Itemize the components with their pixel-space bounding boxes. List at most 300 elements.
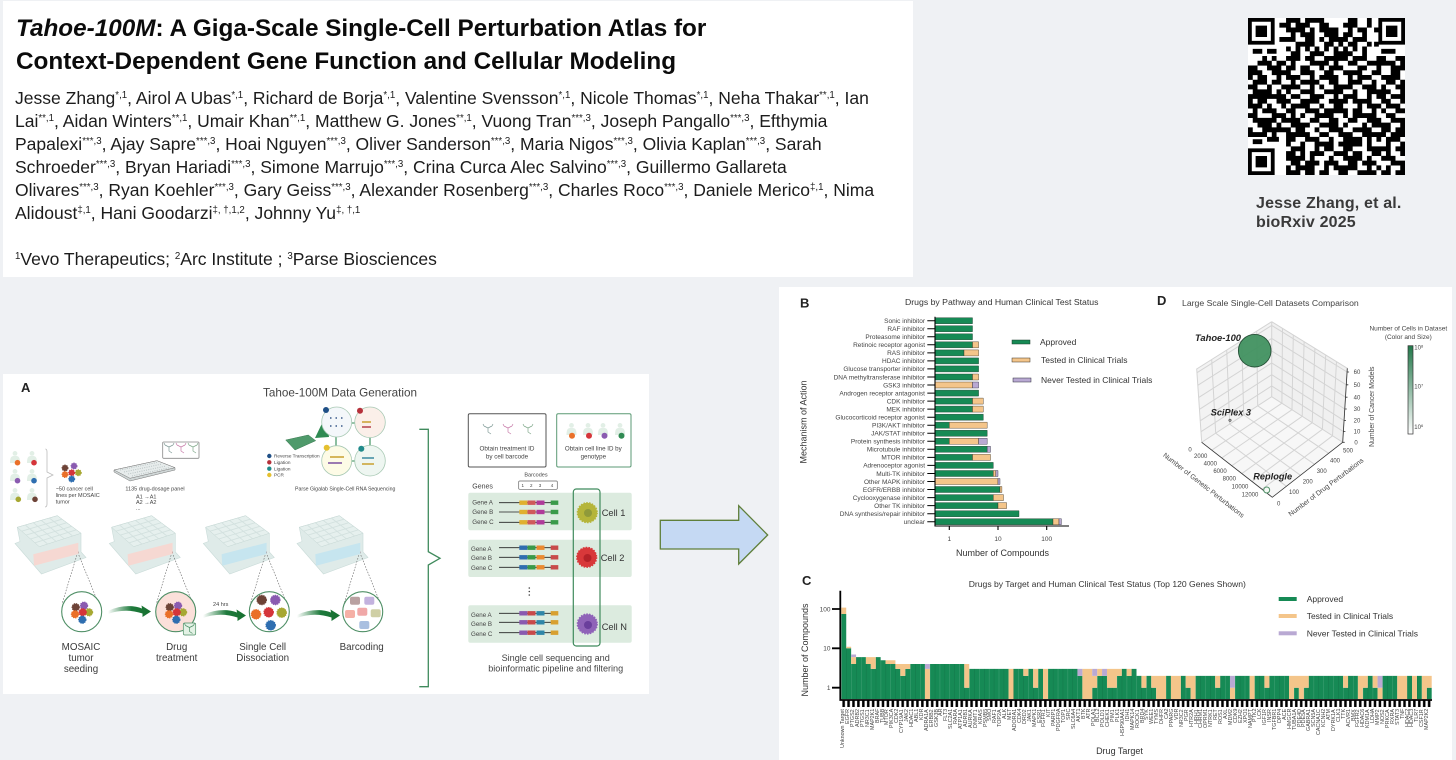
drug target gene labels: PRKCA — [1385, 708, 1391, 727]
cell row 2 — [468, 540, 632, 577]
cell row 1 — [468, 493, 632, 530]
drug target gene labels: SYK — [1144, 708, 1150, 719]
panel letter B: B — [800, 296, 809, 311]
drug target gene labels: LCK — [1257, 708, 1263, 719]
chart B y axis title: Mechanism of Action — [798, 380, 808, 464]
drug target gene labels: MAPK14 — [1130, 708, 1136, 730]
drug target gene labels: ACVR1 — [1346, 708, 1352, 726]
drug target gene labels: ABL1 — [914, 708, 920, 722]
color scale legend: 7 — [1421, 382, 1424, 388]
author list: Jesse Zhang*,1, Airol A Ubas*,1, Richard de Borja*,1, Valentine Svensson*,1, Nicole Thomas*,1, Neha Thakar**,1, Ian — [15, 88, 869, 108]
drug target gene labels: NR3C2 — [1179, 708, 1185, 726]
drug panel note: 1135 drug-dosage panel — [125, 487, 185, 493]
color scale legend — [1369, 326, 1447, 434]
panel A: Tahoe-100M data generation — [3, 374, 649, 694]
drug target gene labels: TOP2A — [997, 708, 1003, 726]
cell row 2: Gene A — [471, 546, 493, 553]
cell row N: Gene B — [471, 621, 492, 628]
cell row N: Cell N — [602, 622, 627, 632]
chart D title: Large Scale Single-Cell Datasets Comparison — [1182, 298, 1359, 308]
drug target gene labels: DHFR — [1159, 708, 1165, 723]
drug target gene labels: BCL2 — [1095, 708, 1101, 722]
bar chart: drug targets: 1 — [827, 685, 831, 692]
drug target gene labels: BRD4 — [1140, 708, 1146, 723]
sequencing legend: Ligation — [274, 460, 291, 465]
drug target gene labels: CLK1 — [1336, 708, 1342, 722]
drug target gene labels: HDAC3 — [1409, 708, 1415, 727]
drug target gene labels: ERBB2 — [929, 708, 935, 726]
drug target gene labels: RXRA — [1390, 708, 1396, 723]
drug target gene labels: CACNA1C — [1316, 708, 1322, 734]
drug target gene labels: SLC2A1 — [948, 708, 954, 729]
drug target gene labels: EGFR — [845, 708, 851, 723]
bar chart: mechanism of action: DNA methyltransferase inhibitor — [834, 374, 926, 381]
drug target gene labels: XPO1 — [1243, 708, 1249, 723]
bar chart: mechanism of action — [834, 317, 1069, 543]
step: single cell dissociation: Single Cell — [239, 642, 286, 653]
drug target gene labels: ADRB1 — [963, 708, 969, 726]
drug target gene labels: KDM1A — [1365, 708, 1371, 727]
drug target gene labels: OPRM1 — [1203, 708, 1209, 728]
drug target gene labels: ADRA1A — [924, 708, 930, 730]
drug target gene labels: CHEK1 — [1105, 708, 1111, 726]
drug target gene labels: AR — [938, 708, 944, 716]
drug target gene labels: HDAC1 — [909, 708, 915, 727]
drug target gene labels: DPP4 — [1277, 708, 1283, 723]
drug target gene labels: DYRK1A — [1331, 708, 1337, 730]
bubble: Tahoe-100 — [1195, 332, 1271, 367]
arrow: treatment to dissociation, 24 hrs: 24 hrs — [213, 602, 229, 608]
drug target gene labels: RAF1 — [992, 708, 998, 722]
chart B legend — [1012, 337, 1152, 385]
drug target gene labels: PSMB5 — [983, 708, 989, 727]
drug target gene labels: HRH1 — [1194, 708, 1200, 723]
drug target gene labels: ADORA1 — [1012, 708, 1018, 731]
drug target gene labels: ESR1 — [1037, 708, 1043, 723]
drug target gene labels: TOP1 — [1061, 708, 1067, 722]
drug target gene labels: NR3C1 — [865, 708, 871, 726]
drug target gene labels: IDH1 — [1125, 708, 1131, 721]
axis tick labels: 10 — [1354, 430, 1361, 436]
cell line note: tumor — [56, 500, 70, 506]
drug target gene labels: GSK3B — [934, 708, 940, 726]
pipeline caption — [488, 653, 623, 674]
drug target gene labels: WEE1 — [1149, 708, 1155, 724]
chart C legend: Approved — [1307, 594, 1343, 604]
title: Tahoe-100M: A Giga-Scale Single-Cell Perturbation Atlas for — [16, 15, 706, 42]
cell row 1: Gene C — [472, 519, 494, 526]
drug target gene labels: MTOR — [884, 708, 890, 724]
axis tick labels: 500 — [1343, 448, 1354, 454]
box: treatment ID — [468, 414, 546, 467]
drug target gene labels: KRAS — [978, 708, 984, 723]
bar chart: mechanism of action: Multi-TK inhibitor — [876, 471, 926, 478]
curly brace — [419, 429, 440, 687]
drug target gene labels: CSF1R — [1419, 708, 1425, 726]
bar chart: mechanism of action: MEK inhibitor — [886, 406, 926, 413]
arrow: dissociation to barcoding — [297, 610, 340, 621]
cell line note: lines per MOSAIC — [56, 493, 100, 499]
bar chart: mechanism of action: GSK3 inhibitor — [883, 382, 926, 389]
drug target gene labels: PIK3CA — [889, 708, 895, 728]
step: drug treatment: treatment — [156, 653, 198, 664]
Parse sequencing workflow — [286, 407, 385, 476]
chart B x axis title: Number of Compounds — [956, 548, 1050, 558]
color scale legend: 8 — [1421, 344, 1424, 348]
drug target gene labels: EZH2 — [1238, 708, 1244, 722]
step: barcoding — [340, 592, 384, 653]
drug target gene labels: MAPK1 — [1032, 708, 1038, 727]
patient cell lines — [10, 449, 53, 507]
drug target gene labels: ADRB2 — [855, 708, 861, 726]
chart C legend: Never Tested in Clinical Trials — [1307, 628, 1418, 638]
axis titles: Number of Cancer Models — [1369, 366, 1376, 447]
panel C: drugs by target — [800, 573, 1432, 756]
arrow: treatment to dissociation, 24 hrs — [203, 602, 246, 621]
drug target gene labels: INSR — [1267, 708, 1273, 721]
bar chart: mechanism of action: HDAC inhibitor — [882, 358, 926, 365]
drug target gene labels: JAK2 — [904, 708, 910, 721]
axis tick labels: 10000 — [1232, 485, 1249, 491]
drug target gene labels: CA2 — [1164, 708, 1170, 719]
bar chart: mechanism of action: Retinoic receptor agonist — [853, 342, 925, 349]
results panel background — [779, 287, 1452, 760]
author list: Papalexi***,3, Ajay Sapre***,3, Hoai Nguyen***,3, Oliver Sanderson***,3, Maria Nigos***,3, Olivia Kaplan***,3, Sarah — [15, 134, 822, 154]
author list: Lai**,1, Aidan Winters**,1, Umair Khan**,1, Matthew G. Jones**,1, Vuong Tran***,3, Joseph Pangallo***,3, Efthymia — [15, 111, 827, 131]
author list: Alidoust‡,1, Hani Goodarzi‡, †,1,2, Johnny Yu‡, †,1 — [15, 203, 360, 223]
drug target gene labels: RARA — [953, 708, 959, 723]
cell line note: ~50 cancer cell — [56, 486, 93, 492]
cancer cell cluster — [62, 463, 81, 482]
drug target gene labels: PPARG — [1169, 708, 1175, 727]
bar chart: mechanism of action: unclear — [904, 519, 926, 526]
drug target gene labels: JAK1 — [1027, 708, 1033, 721]
drug target gene labels: ATP1A1 — [958, 708, 964, 728]
axis tick labels: 200 — [1303, 480, 1313, 486]
drug target gene labels: SCN5A — [1311, 708, 1317, 726]
citation text: Jesse Zhang, et al. — [1256, 195, 1402, 212]
drug target gene labels: SMO — [987, 708, 993, 721]
bar chart: mechanism of action: RAS inhibitor — [887, 350, 926, 357]
small drug plate — [114, 461, 175, 481]
color scale legend: 10 — [1414, 346, 1421, 352]
cell row 1: Gene B — [472, 509, 493, 516]
bar chart: mechanism of action: MTOR inhibitor — [881, 455, 926, 462]
barcodes key: 4 — [551, 483, 554, 488]
barcodes key: 1 — [521, 483, 524, 488]
panel B: drugs by pathway — [798, 296, 1152, 558]
axis tick labels: 400 — [1330, 458, 1341, 464]
color scale legend: (Color and Size) — [1385, 334, 1432, 341]
chart C x axis title: Drug Target — [1096, 746, 1143, 756]
drug target gene labels: NOS2 — [1380, 708, 1386, 723]
drug target gene labels: DNMT1 — [973, 708, 979, 727]
axis tick labels: 8000 — [1223, 477, 1237, 483]
color scale legend: 6 — [1421, 423, 1424, 428]
bar chart: mechanism of action: Cyclooxygenase inhibitor — [853, 495, 926, 502]
axis titles: Number of Drug Perturbations — [1288, 457, 1366, 518]
barcodes key: Genes — [472, 484, 493, 490]
citation text: bioRxiv 2025 — [1256, 214, 1356, 231]
bubble: Replogle — [1253, 472, 1292, 493]
drug target gene labels: VDR — [1174, 708, 1180, 720]
drug target gene labels: TNF — [1400, 708, 1406, 719]
chart B legend: Tested in Clinical Trials — [1041, 355, 1127, 365]
bar chart: mechanism of action: Microtubule inhibitor — [867, 447, 926, 454]
axis tick labels: 0 — [1354, 440, 1358, 446]
bar chart: mechanism of action: Androgen receptor antagonist — [839, 390, 925, 397]
bar chart: mechanism of action: Sonic inhibitor — [884, 318, 926, 325]
drug target gene labels: ATM — [1326, 708, 1332, 719]
citation text — [1256, 195, 1402, 231]
cell row 2: Gene B — [471, 555, 492, 562]
axis tick labels: 4000 — [1204, 462, 1218, 468]
bar chart: mechanism of action: JAK/STAT inhibitor — [871, 431, 926, 438]
drug target gene labels: ALK — [1002, 708, 1008, 719]
drug target gene labels: TUBA1A — [1292, 708, 1298, 729]
bubble: SciPlex 3: SciPlex 3 — [1211, 408, 1251, 418]
drug target gene labels: PTGS2 — [850, 708, 856, 726]
axis titles — [1161, 366, 1376, 520]
sequencing legend: Ligation — [274, 466, 291, 471]
color scale legend: Number of Cells in Dataset — [1369, 326, 1447, 333]
box: cell line ID: genotype — [581, 454, 607, 460]
cell row 1: Cell 1 — [602, 508, 625, 518]
bubble: Replogle: Replogle — [1253, 472, 1292, 482]
title — [16, 15, 706, 75]
header panel: title and authors — [3, 1, 913, 277]
axis tick labels: 300 — [1317, 469, 1327, 475]
drug target gene labels: HDAC2 — [1405, 708, 1411, 727]
arrow: seeding to treatment — [108, 606, 151, 617]
drug target gene labels: BRAF — [875, 708, 881, 723]
bar chart: mechanism of action: PI3K/AKT inhibitor — [872, 422, 926, 430]
color scale legend: 10 — [1414, 425, 1421, 431]
drug target gene labels: HTR2A — [1189, 708, 1195, 726]
axis tick labels: 12000 — [1242, 492, 1259, 498]
chart C legend — [1279, 594, 1418, 638]
axis titles: Number of Genetic Perturbations — [1161, 452, 1246, 520]
drug target gene labels: CHRM1 — [1198, 708, 1204, 728]
author list: Schroeder***,3, Bryan Hariadi***,3, Simone Marrujo***,3, Crina Curca Alec Salvino***,3, Guillermo Gallareta — [15, 157, 787, 177]
step: MOSAIC tumor seeding: seeding — [64, 664, 98, 675]
bar chart: drug targets: 10 — [823, 646, 831, 653]
icon: QR code — [1248, 18, 1405, 175]
drug target gene labels: PGR — [1184, 708, 1190, 720]
bar chart: mechanism of action: EGFR/ERBB inhibitor — [863, 487, 926, 494]
drug target gene labels: PTGS1 — [860, 708, 866, 726]
drug target gene labels: ACE — [1282, 708, 1288, 720]
cell row N: Gene C — [471, 631, 493, 638]
panel letter A: A — [21, 380, 31, 395]
drug target gene labels: NAMPT — [1248, 708, 1254, 727]
ellipsis between rows — [528, 587, 530, 596]
cell highlight frame — [573, 489, 600, 646]
step: barcoding: Barcoding — [340, 642, 384, 653]
drug target gene labels: MMP2 — [1375, 708, 1381, 724]
drug target gene labels: LDHA — [1370, 708, 1376, 723]
drug target gene labels: CDK2 — [894, 708, 900, 723]
barcodes key: Barcodes — [524, 473, 548, 479]
drug target gene labels: Unknown Target — [840, 708, 846, 747]
bar chart: mechanism of action: 100 — [1041, 536, 1053, 543]
drug target gene labels: BTK — [1081, 708, 1087, 719]
drug target gene labels: FGFR1 — [1041, 708, 1047, 726]
drug target gene labels: AXL — [1223, 708, 1229, 719]
bubble: Tahoe-100: Tahoe-100 — [1195, 332, 1242, 343]
sequencing caption: Parse Gigalab Single-Cell RNA Sequencing — [295, 486, 395, 492]
drug target gene labels: IGF1R — [1262, 708, 1268, 724]
drug target gene labels: HMGCR — [1287, 708, 1293, 729]
cell row N — [468, 605, 632, 643]
bar chart: mechanism of action: Adrenoceptor agonist — [863, 463, 925, 470]
panel A heading: Tahoe-100M Data Generation — [263, 387, 417, 400]
chart B title: Drugs by Pathway and Human Clinical Test Status — [905, 297, 1099, 307]
axis tick labels: 40 — [1354, 395, 1361, 401]
drug target gene labels: CDK4 — [1017, 708, 1023, 723]
axis tick labels: 50 — [1354, 383, 1361, 389]
drug target gene labels: HDAC6 — [1360, 708, 1366, 727]
drug target gene labels: FLT3 — [943, 708, 949, 721]
drug target gene labels: KIT — [1046, 708, 1052, 717]
step: MOSAIC tumor seeding: tumor — [68, 653, 94, 664]
drug target gene labels: AURKA — [968, 708, 974, 727]
bar chart: mechanism of action: 10 — [994, 536, 1002, 543]
drug target gene labels: TTK — [1341, 708, 1347, 719]
chart C y axis title: Number of Compounds — [800, 603, 810, 697]
bar chart: mechanism of action: 1 — [947, 536, 951, 543]
barcodes key: 3 — [539, 483, 542, 488]
drug panel note: ... — [136, 506, 141, 512]
step: single cell dissociation: Dissociation — [236, 653, 289, 664]
drug target gene labels: POLA1 — [1091, 708, 1097, 726]
drug panel note: A1 →A1 — [136, 494, 156, 500]
cell row N: Gene A — [471, 612, 493, 619]
box: treatment ID: Obtain treatment ID — [480, 446, 535, 452]
chart C title: Drugs by Target and Human Clinical Test Status (Top 120 Genes Shown) — [969, 579, 1246, 589]
axis tick labels: 100 — [1289, 490, 1300, 496]
color scale legend: 10 — [1414, 384, 1421, 390]
drug target gene labels: DRD2 — [1022, 708, 1028, 723]
axis tick labels — [1188, 370, 1361, 508]
drug target gene labels: TGFBR1 — [1272, 708, 1278, 730]
bar chart: drug targets — [820, 591, 1432, 707]
drug target gene labels: TUBB — [880, 708, 886, 723]
3D scatter plot — [1161, 322, 1376, 520]
chart B legend: Never Tested in Clinical Trials — [1041, 375, 1152, 385]
drug target gene labels: HSP90AA1 — [1120, 708, 1126, 736]
pipeline caption: bioinformatic pipeline and filtering — [488, 664, 623, 674]
drug target gene labels: ROS1 — [1218, 708, 1224, 723]
step: drug treatment: Drug — [166, 642, 187, 653]
bar chart: mechanism of action: CDK inhibitor — [887, 398, 926, 405]
drug target gene labels: PDGFRA — [1056, 708, 1062, 731]
cell line note — [56, 486, 100, 506]
drug target gene labels: AKT1 — [1076, 708, 1082, 722]
drug panel note: A2 →A2 — [136, 500, 156, 506]
step: single cell dissociation — [236, 592, 289, 664]
box: cell line ID: Obtain cell line ID by — [565, 446, 623, 452]
author list: Olivares***,3, Ryan Koehler***,3, Gary Geiss***,3, Alexander Rosenberg***,3, Charles Roco***,3, Daniele Merico‡,1, Nima — [15, 180, 874, 200]
cell row 2: Gene C — [471, 565, 493, 572]
drug target gene labels: MAP2K1 — [870, 708, 876, 730]
step: MOSAIC tumor seeding — [62, 592, 102, 675]
chart C legend: Tested in Clinical Trials — [1307, 611, 1393, 621]
title: Context-Dependent Gene Function and Cellular Modeling — [16, 48, 676, 75]
drug target gene labels: ROCK1 — [1135, 708, 1141, 727]
drug target gene labels: MDM2 — [1228, 708, 1234, 724]
drug target gene labels: MET — [1007, 708, 1013, 720]
drug target gene labels: CYP19A1 — [899, 708, 905, 732]
drug target gene labels: SLC6A4 — [1071, 708, 1077, 729]
axis tick labels: 30 — [1354, 407, 1361, 413]
drug target gene labels: PDE4D — [1297, 708, 1303, 726]
drug target gene labels: ATR — [1086, 708, 1092, 719]
author list: 1Vevo Therapeutics; 2Arc Institute ; 3Parse Biosciences — [15, 249, 437, 269]
drug molecule box — [163, 442, 199, 458]
bar chart: mechanism of action: DNA synthesis/repair inhibitor — [840, 511, 926, 518]
step: MOSAIC tumor seeding: MOSAIC — [62, 642, 100, 653]
drug target gene labels: PDE5A — [1301, 708, 1307, 726]
axis tick labels: 6000 — [1213, 469, 1227, 475]
bar chart: mechanism of action: Proteasome inhibitor — [865, 334, 926, 341]
drug target gene labels: PIM1 — [1110, 708, 1116, 721]
drug target gene labels: TLR7 — [1414, 708, 1420, 722]
drug target gene labels: POLD1 — [1100, 708, 1106, 726]
drug target gene labels: BMX — [1351, 708, 1357, 720]
barcodes key — [472, 473, 557, 490]
pipeline caption: Single cell sequencing and — [502, 653, 610, 663]
drug target gene labels: MAP2K2 — [1424, 708, 1430, 730]
drug panel note — [125, 487, 185, 512]
bar chart: mechanism of action: Protein synthesis inhibitor — [851, 439, 926, 446]
chart B legend: Approved — [1040, 337, 1077, 347]
bar chart: drug targets: 100 — [820, 606, 831, 613]
cell row 1: Gene A — [472, 500, 494, 506]
axis tick labels: 20 — [1354, 419, 1361, 425]
bar chart: mechanism of action: RAF inhibitor — [887, 326, 926, 333]
axis tick labels: 60 — [1354, 370, 1361, 376]
drug target gene labels: RET — [1213, 708, 1219, 719]
panel letter C: C — [802, 573, 812, 588]
arrow: from data generation to results — [660, 506, 768, 564]
drug target gene labels: CDK9 — [1233, 708, 1239, 723]
bar chart: mechanism of action: Other MAPK inhibitor — [864, 479, 926, 486]
cell row 2: Cell 2 — [601, 553, 624, 563]
bar chart: mechanism of action: Glucose transporter inhibitor — [843, 366, 926, 373]
drug target gene labels: PTK2 — [1252, 708, 1258, 722]
sequencing legend: Reverse Transcription — [274, 454, 320, 459]
drug target gene labels: GABRA1 — [1306, 708, 1312, 730]
drug target gene labels: KDR — [919, 708, 925, 720]
axis tick labels: 2000 — [1194, 454, 1208, 460]
drug target gene labels — [840, 708, 1430, 748]
author list — [15, 88, 874, 269]
box: treatment ID: by cell barcode — [486, 454, 529, 460]
drug target gene labels: TYMS — [1154, 708, 1160, 723]
bar chart: mechanism of action: Other TK inhibitor — [874, 503, 926, 510]
panel D: dataset comparison — [1157, 293, 1447, 520]
step: drug treatment — [156, 592, 198, 664]
sequencing legend — [267, 454, 320, 478]
sequencing legend: PCR — [274, 473, 285, 478]
axis tick labels: 0 — [1188, 448, 1192, 454]
barcodes key: 2 — [530, 483, 533, 488]
drug target gene labels: KCNH2 — [1321, 708, 1327, 727]
bar chart: mechanism of action: Glucocorticoid receptor agonist — [835, 414, 925, 422]
drug target gene labels: STAT3 — [1395, 708, 1401, 724]
well plates — [15, 516, 379, 604]
